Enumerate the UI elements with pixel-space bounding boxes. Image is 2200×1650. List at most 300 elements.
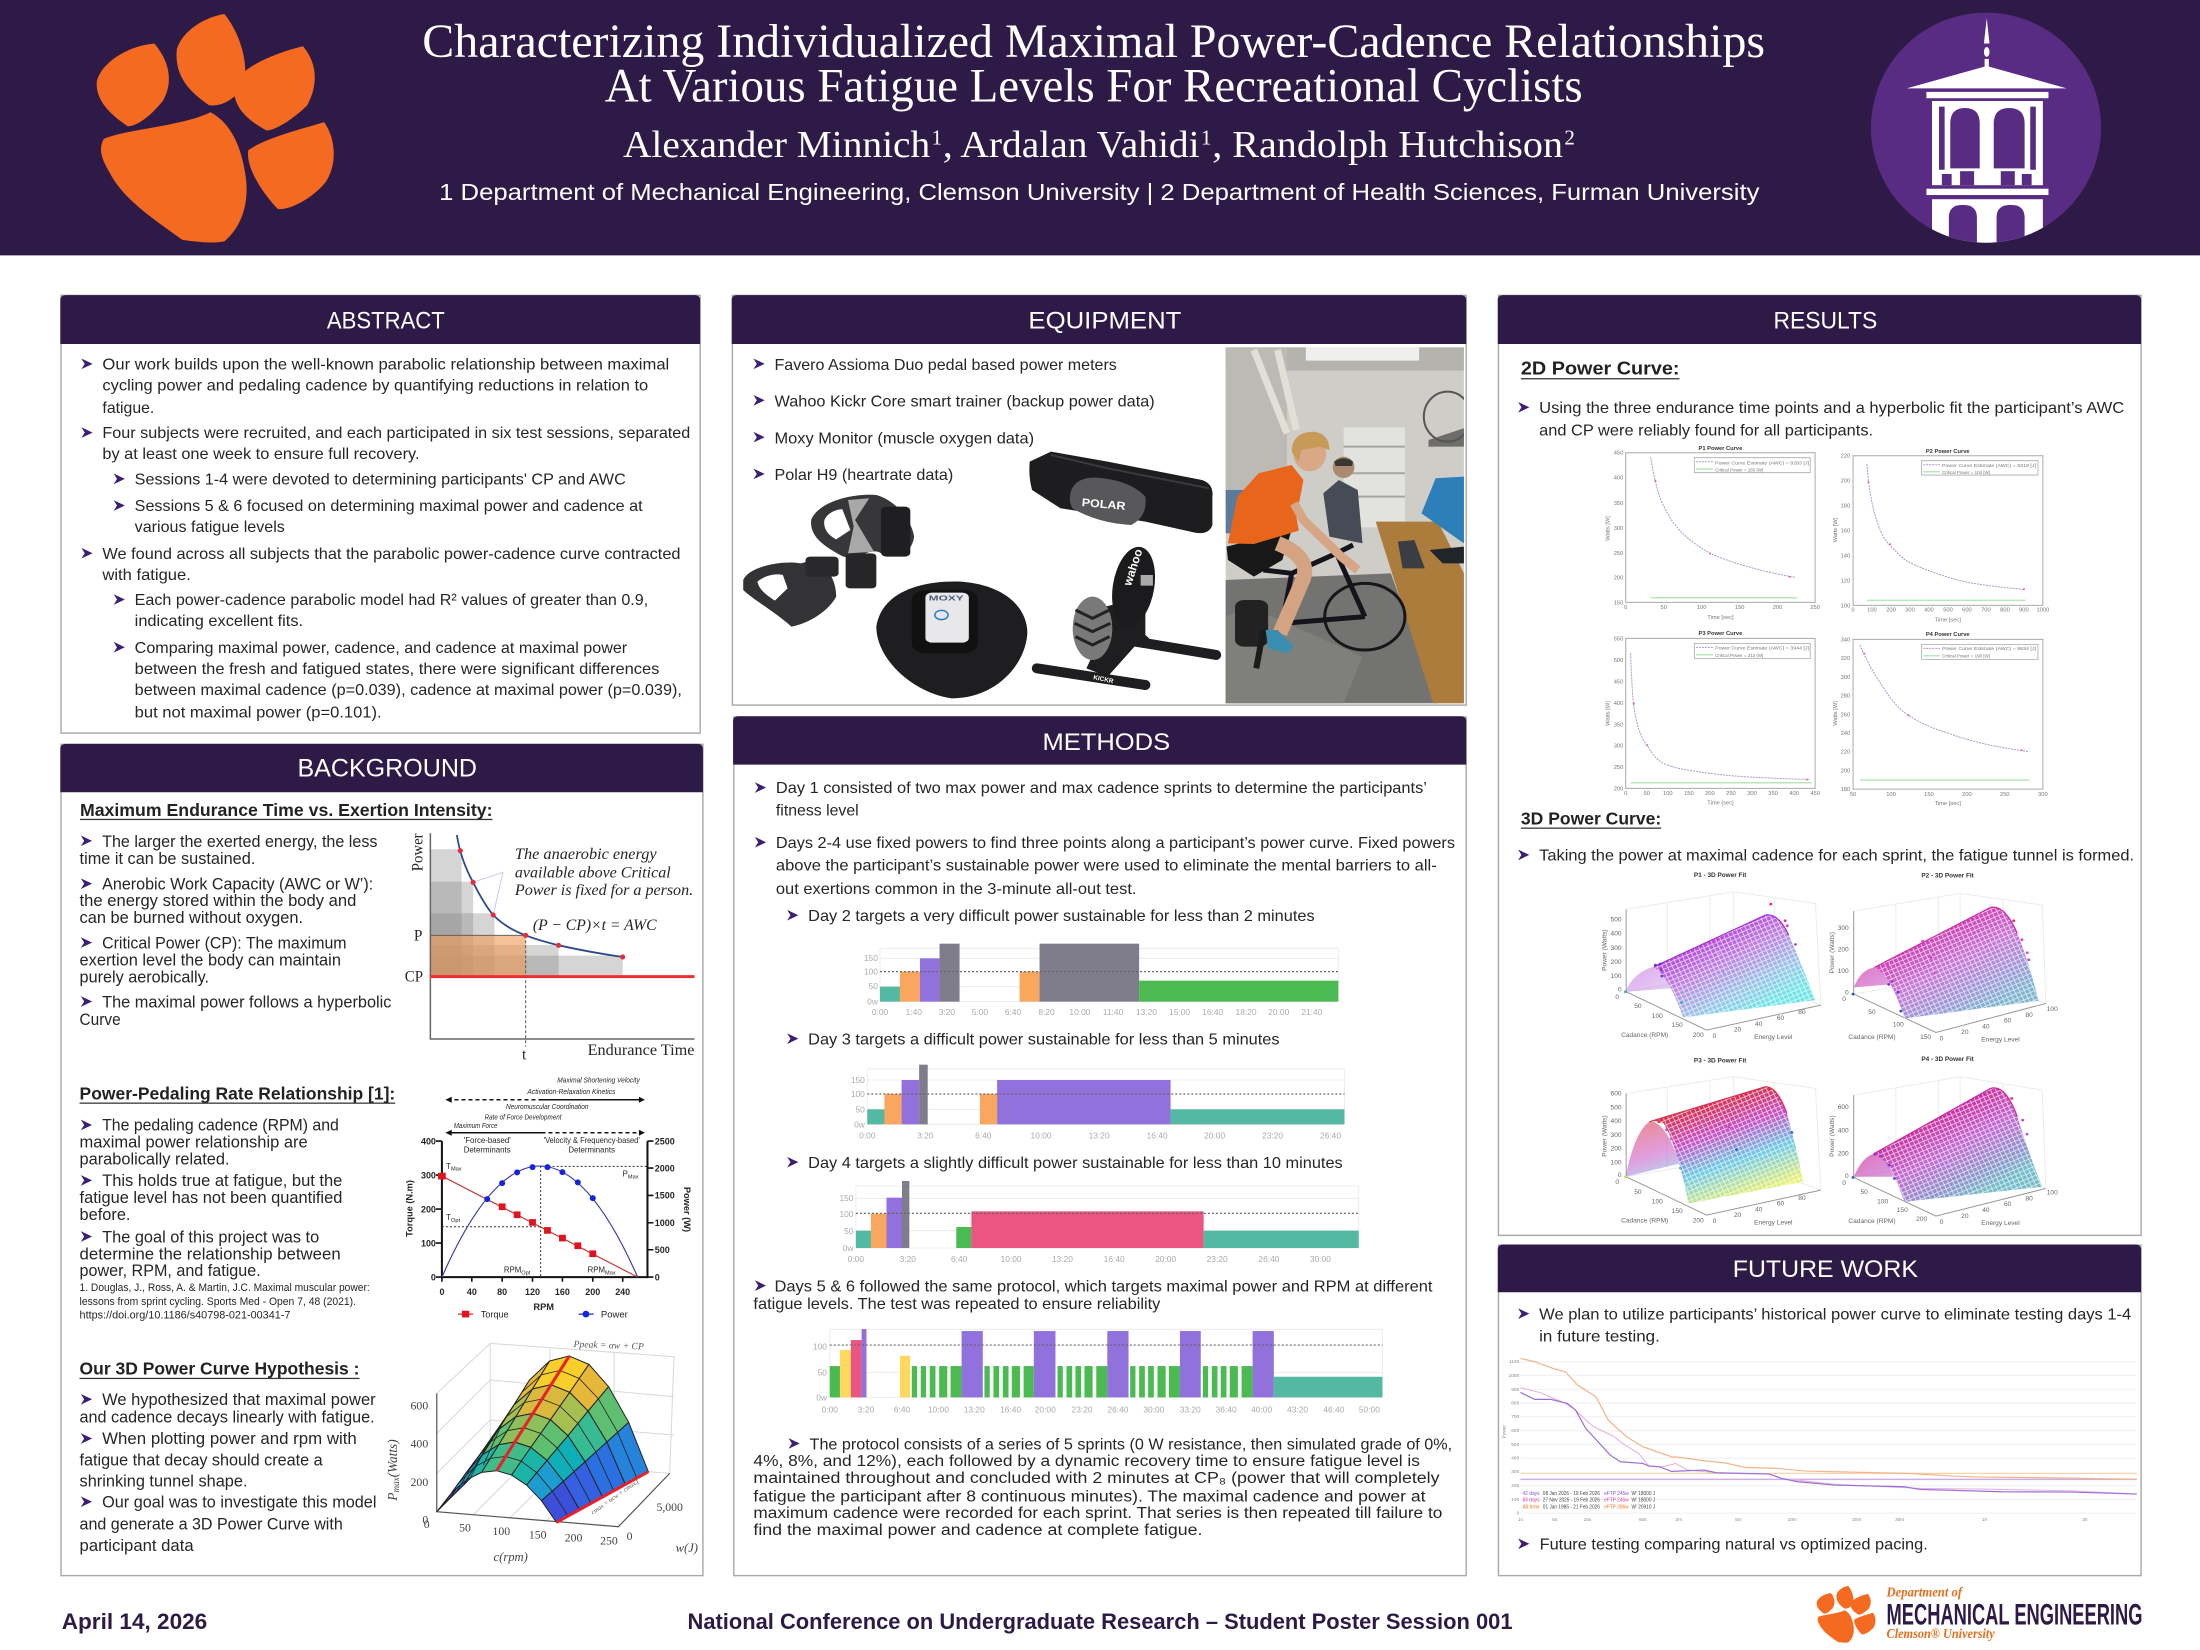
text: day 3: Day 3 targets a difficult power sustainable for less than 5 minutes xyxy=(808,1031,1280,1048)
text: 2D results xyxy=(1518,400,2124,439)
title: At Various Fatigue Levels For Recreational Cyclists xyxy=(605,60,1583,113)
power-pedaling text: maximal power relationship are xyxy=(80,1134,308,1152)
chart: P3 3D power fit: 500 xyxy=(1611,1104,1622,1111)
chart: historical power duration curve xyxy=(1501,1358,2137,1523)
chart: 3D power curve hypothesis surface: 5,000 xyxy=(656,1501,683,1514)
abstract text: We found across all subjects that the parabolic power-cadence curve contracted xyxy=(102,546,680,563)
chart: day 2 workout: 16:40 xyxy=(1202,1007,1224,1017)
chart: 3D power curve hypothesis surface: 0 xyxy=(422,1514,428,1527)
chart: P3 power curve: Power Curve Estimate (AWC) = 3944 [J] xyxy=(1715,646,1809,651)
chart: torque and power vs RPM: 'Force-based' xyxy=(464,1136,511,1145)
chart: torque and power vs RPM: Activation-Relaxation Kinetics xyxy=(526,1087,616,1096)
endurance text xyxy=(80,833,391,1029)
chart: P3 3D power fit: 0 xyxy=(1618,1172,1622,1179)
chart: historical power duration curve: eFTP 245w xyxy=(1604,1498,1629,1504)
subheading: 3D hypothesis: Our 3D Power Curve Hypothesis : xyxy=(80,1359,359,1378)
chart: day 4 workout: 50 xyxy=(844,1226,854,1236)
chart: day 5 and 6 workout: 16:40 xyxy=(1000,1404,1021,1414)
chart: historical power duration curve: W' 18000 J xyxy=(1631,1498,1656,1504)
chart: P4 3D power fit: 400 xyxy=(1838,1127,1849,1134)
chart: historical power duration curve: 600 xyxy=(1511,1428,1520,1434)
authors: Alexander Minnich xyxy=(623,124,930,166)
chart: torque and power vs RPM: Neuromuscular Coordination xyxy=(506,1102,588,1111)
chart: P3 3D power fit: 600 xyxy=(1611,1091,1622,1098)
chart: torque and power vs RPM: 240 xyxy=(615,1287,630,1297)
hypothesis text: fatigue that decay should create a xyxy=(80,1451,324,1469)
hypothesis text: and cadence decays linearly with fatigue. xyxy=(80,1408,375,1426)
chart: day 2 workout: 11:40 xyxy=(1103,1007,1124,1017)
chart: historical power duration curve: 1000 xyxy=(1509,1373,1520,1379)
power-pedaling text: before. xyxy=(80,1206,130,1224)
chart: P2 power curve: 200 xyxy=(1841,479,1850,485)
chart: historical power duration curve: 2m xyxy=(1675,1517,1682,1523)
chart: P2 power curve: 200 xyxy=(1886,608,1896,614)
chart: P3 3D power fit: 300 xyxy=(1611,1132,1622,1139)
chart: day 4 workout: 13:20 xyxy=(1052,1254,1073,1264)
chart: P2 3D power fit: 0 xyxy=(1845,989,1849,996)
citation: lessons from sprint cycling. Sports Med - Open 7, 48 (2021). xyxy=(80,1296,356,1308)
chart: P2 power curve: 100 xyxy=(1841,603,1850,609)
authors: , Randolph Hutchison xyxy=(1212,124,1563,166)
chart: P3 3D power fit: 50 xyxy=(1634,1189,1642,1196)
chart: day 2 workout: 15:00 xyxy=(1169,1007,1190,1017)
footer conference: National Conference on Undergraduate Research – Student Poster Session 001 xyxy=(687,1609,1512,1634)
chart: P3 power curve: 450 xyxy=(1810,791,1820,797)
chart: torque and power vs RPM: 120 xyxy=(525,1287,540,1297)
chart: torque and power vs RPM: 2500 xyxy=(655,1136,675,1146)
equipment list: Favero Assioma Duo pedal based power meters xyxy=(774,357,1117,374)
icon: small Clemson paw xyxy=(1817,1586,1875,1643)
chart: P1 3D power fit: 0 xyxy=(1615,994,1619,1001)
chart: day 2 workout: 0w xyxy=(867,997,879,1007)
chart: torque and power vs RPM: 200 xyxy=(421,1204,436,1214)
abstract text: by at least one week to ensure full recovery. xyxy=(102,446,420,463)
chart: P4 3D power fit: 20 xyxy=(1961,1213,1969,1220)
chart: P2 3D power fit: 60 xyxy=(2004,1018,2012,1025)
chart: P4 power curve: Critical Power = 190 [W] xyxy=(1942,653,1990,658)
text: day 2: Day 2 targets a very difficult power sustainable for less than 2 minutes xyxy=(808,908,1315,925)
chart: torque and power vs RPM: 160 xyxy=(555,1287,570,1297)
chart: P3 3D power fit: 100 xyxy=(1652,1198,1663,1205)
heading: abstract: ABSTRACT xyxy=(327,307,445,334)
chart: historical power duration curve: 2h xyxy=(2082,1517,2088,1523)
chart: day 5 and 6 workout: 33:20 xyxy=(1180,1404,1201,1414)
hypothesis text: We hypothesized that maximal power xyxy=(102,1391,376,1409)
chart: historical power duration curve: 5s xyxy=(1552,1517,1558,1523)
chart: day 5 and 6 workout xyxy=(813,1329,1382,1414)
citation: https://doi.org/10.1186/s40798-021-00341-7 xyxy=(80,1310,290,1322)
chart: 3D power curve hypothesis surface: w(J) xyxy=(676,1541,698,1555)
chart: P4 power curve: 260 xyxy=(1841,712,1850,718)
text: protocol description: maximum cadence were recorded for each sprint. That series is then repeated till failure to xyxy=(753,1505,1443,1522)
endurance text: exertion level the body can maintain xyxy=(80,951,341,969)
chart: day 3 workout: 23:20 xyxy=(1262,1131,1283,1141)
chart: 3D power curve hypothesis surface: 0 xyxy=(424,1518,430,1531)
endurance text: the energy stored within the body and xyxy=(80,892,356,910)
chart: P2 power curve: 300 xyxy=(1905,608,1915,614)
chart: P1 3D power fit: 40 xyxy=(1755,1021,1763,1028)
chart: day 2 workout: 6:40 xyxy=(1005,1007,1022,1017)
footer logo: Department of Mechanical Engineering: Department of xyxy=(1886,1585,1964,1600)
chart: P2 3D power fit: 20 xyxy=(1961,1029,1969,1036)
chart: day 4 workout: 20:00 xyxy=(1155,1254,1177,1264)
chart: P2 3D power fit: Energy Level xyxy=(1981,1036,2020,1043)
chart: P1 power curve: 200 xyxy=(1773,605,1782,611)
chart: day 3 workout: 10:00 xyxy=(1031,1131,1052,1141)
chart: P4 3D power fit: 0 xyxy=(1845,1173,1849,1180)
chart: P1 power curve: 400 xyxy=(1614,476,1623,482)
text: protocol description: The protocol consists of a series of 5 sprints (0 W resistance, then simulated grade of 0%, xyxy=(810,1436,1452,1453)
text: protocol description xyxy=(753,1436,1452,1539)
equipment list xyxy=(753,357,1155,484)
power-pedaling text xyxy=(80,1117,342,1280)
chart: P2 power curve: Critical Power = 104 [W] xyxy=(1942,470,1990,475)
chart: P2 power curve: 600 xyxy=(1962,608,1972,614)
chart: P4 power curve: 240 xyxy=(1841,731,1850,737)
chart: torque and power vs RPM: 200 xyxy=(585,1287,600,1297)
text: protocol description: maintained throughout and concluded with 2 minutes at CP₈ (power that will completely xyxy=(753,1470,1440,1487)
chart: P2 3D power fit: 0 xyxy=(1842,996,1846,1003)
chart: day 5 and 6 workout: 100 xyxy=(813,1342,827,1352)
icon: Moxy monitor xyxy=(876,582,1027,698)
chart: P2 power curve: 100 xyxy=(1867,608,1877,614)
abstract text: Comparing maximal power, cadence, and cadence at maximal power xyxy=(135,640,628,657)
chart: P4 power curve: 50 xyxy=(1850,792,1856,798)
chart: torque and power vs RPM: 0 xyxy=(439,1287,444,1297)
chart: P3 power curve: 200 xyxy=(1614,786,1623,792)
chart: P1 power curve: 250 xyxy=(1614,551,1623,557)
chart: P3 power curve: 100 xyxy=(1663,791,1673,797)
chart: torque and power vs RPM: 500 xyxy=(655,1245,670,1255)
chart: P4 3D power fit: 60 xyxy=(2004,1201,2012,1208)
text: days 5 and 6 xyxy=(753,1279,1433,1313)
chart: day 3 workout: 100 xyxy=(851,1089,865,1099)
chart: P4 power curve: Watts [W] xyxy=(1833,701,1839,726)
chart: torque and power vs RPM: RPM xyxy=(533,1302,554,1312)
chart: P3 3D power fit: 20 xyxy=(1734,1212,1742,1219)
chart: P2 power curve: 800 xyxy=(2000,608,2010,614)
chart: P2 3D power fit: 100 xyxy=(2047,1006,2058,1013)
chart: P1 power curve: 450 xyxy=(1614,451,1623,457)
chart: P2 3D power fit: Cadance (RPM) xyxy=(1848,1034,1896,1041)
endurance text: time it can be sustained. xyxy=(80,850,255,868)
chart: P3 power curve: Time [sec] xyxy=(1707,800,1734,806)
text: future pacing: Future testing comparing natural vs optimized pacing. xyxy=(1540,1536,1928,1553)
chart: 3D power curve hypothesis surface: 100 xyxy=(492,1525,510,1538)
chart: P3 power curve: 250 xyxy=(1614,765,1623,771)
text: days 5 and 6: fatigue levels. The test was repeated to ensure reliability xyxy=(753,1296,1160,1313)
chart: P2 power curve: 220 xyxy=(1841,454,1850,460)
chart: P1 power curve: 100 xyxy=(1697,605,1706,611)
chart: P1 power curve: 300 xyxy=(1614,526,1623,532)
chart: P4 3D power fit: 40 xyxy=(1982,1207,1990,1214)
chart: day 5 and 6 workout: 50:00 xyxy=(1359,1404,1380,1414)
panel: methods xyxy=(733,716,1466,1576)
chart: P4 3D power fit: 80 xyxy=(2025,1196,2033,1203)
chart: historical power duration curve: 60s xyxy=(1639,1517,1647,1523)
chart: P2 3D power fit: 100 xyxy=(1838,968,1849,975)
abstract text: between maximal cadence (p=0.039), cadence at maximal power (p=0.039), xyxy=(135,682,682,699)
chart: historical power duration curve: 300 xyxy=(1511,1469,1520,1475)
chart: P3 power curve: Watts [W] xyxy=(1605,701,1611,726)
chart: P4 power curve: P4 Power Curve xyxy=(1926,632,1970,638)
chart: P3 power curve: 400 xyxy=(1614,701,1623,707)
chart: day 3 workout xyxy=(851,1065,1344,1141)
chart: day 2 workout: 0:00 xyxy=(872,1007,888,1017)
power-pedaling text: parabolically related. xyxy=(80,1151,230,1169)
chart: torque and power vs RPM: Max xyxy=(628,1174,639,1180)
chart: torque and power vs RPM: Maximal Shortening Velocity xyxy=(557,1076,640,1085)
chart: P2 3D power fit: 300 xyxy=(1838,925,1849,932)
hypothesis text: Our goal was to investigate this model xyxy=(102,1494,376,1512)
subheading: 2D power curve: 2D Power Curve: xyxy=(1521,358,1679,379)
chart: P4 3D power fit: 50 xyxy=(1860,1189,1868,1196)
chart: historical power duration curve: 5m xyxy=(1735,1517,1742,1523)
chart: 3D power curve hypothesis surface: P xyxy=(385,1492,400,1501)
chart: P2 power curve: 180 xyxy=(1841,504,1850,510)
chart: day 3 workout: 50 xyxy=(855,1105,865,1115)
chart: 3D power curve hypothesis surface: Ppeak = αw + CP xyxy=(572,1339,644,1352)
chart: historical power duration curve: All time xyxy=(1522,1504,1540,1510)
chart: torque and power vs RPM: Torque xyxy=(481,1309,509,1319)
chart: day 4 workout: 150 xyxy=(839,1193,854,1203)
endurance text: Anerobic Work Capacity (AWC or W’): xyxy=(102,875,373,893)
chart: P3 power curve: 500 xyxy=(1614,658,1623,664)
chart: 3D power curve hypothesis surface: 200 xyxy=(411,1476,428,1489)
chart: historical power duration curve: 200 xyxy=(1511,1483,1520,1489)
chart: P4 3D power fit: Energy Level xyxy=(1981,1220,2020,1227)
chart: day 2 workout: 18:20 xyxy=(1236,1007,1257,1017)
chart: P2 power curve: 120 xyxy=(1841,578,1850,584)
chart: day 5 and 6 workout: 46:40 xyxy=(1323,1404,1345,1414)
chart: 3D power curve hypothesis surface: (Watts) xyxy=(385,1439,400,1477)
abstract text: Our work builds upon the well-known parabolic relationship between maximal xyxy=(102,356,669,373)
chart: P3 3D power fit: 200 xyxy=(1611,1146,1622,1153)
chart: 3D power curve hypothesis surface: 400 xyxy=(411,1438,428,1451)
chart: P2 power curve xyxy=(1833,449,2049,624)
panel: results xyxy=(1498,295,2141,1235)
chart: historical power duration curve: W' 18000 J xyxy=(1631,1491,1656,1497)
chart: P3 3D power fit: 200 xyxy=(1693,1217,1704,1224)
chart: torque and power vs RPM: Opt xyxy=(451,1218,460,1224)
chart: day 5 and 6 workout: 36:40 xyxy=(1216,1404,1237,1414)
abstract text: Each power-cadence parabolic model had R² values of greater than 0.9, xyxy=(135,592,648,609)
chart: day 5 and 6 workout: 0w xyxy=(816,1393,828,1403)
icon: Wahoo Kickr trainer: wahoo xyxy=(1120,547,1145,588)
chart: historical power duration curve: eFTP 245w xyxy=(1604,1491,1629,1497)
chart: torque and power vs RPM: 2000 xyxy=(655,1163,675,1173)
chart: P3 power curve: 50 xyxy=(1644,791,1650,797)
chart: P3 power curve: 350 xyxy=(1768,791,1778,797)
chart: historical power duration curve: 84 days xyxy=(1522,1498,1540,1504)
chart: P4 3D power fit: 100 xyxy=(1877,1198,1888,1205)
chart: historical power duration curve: 400 xyxy=(1511,1455,1520,1461)
chart: 3D power curve hypothesis surface: c(rpm) xyxy=(494,1550,528,1564)
chart: P1 3D power fit xyxy=(1602,872,1821,1041)
chart: day 2 workout: 50 xyxy=(869,981,878,991)
chart: P1 power curve: 50 xyxy=(1661,605,1667,611)
chart: P4 3D power fit: 200 xyxy=(1838,1150,1849,1157)
chart: P1 power curve: Time [sec] xyxy=(1707,615,1734,621)
chart: P1 3D power fit: 100 xyxy=(1611,973,1622,980)
chart: P4 power curve: 340 xyxy=(1841,637,1850,643)
chart: P3 3D power fit: Power (Watts) xyxy=(1602,1115,1609,1157)
text: future plan xyxy=(1518,1306,2131,1346)
chart: historical power duration curve: 30m xyxy=(1895,1517,1904,1523)
authors xyxy=(623,124,1575,166)
icon: Clemson paw logo xyxy=(97,14,334,243)
chart: day 5 and 6 workout: 0:00 xyxy=(822,1404,838,1414)
chart: P1 power curve: 350 xyxy=(1614,501,1623,507)
chart: day 4 workout: 0:00 xyxy=(848,1254,864,1264)
footer logo: Department of Mechanical Engineering: Clemson® University xyxy=(1887,1626,1995,1641)
chart: P2 power curve: 140 xyxy=(1841,553,1850,559)
chart: torque and power vs RPM: Power (W) xyxy=(682,1187,692,1232)
chart: day 3 workout: 0:00 xyxy=(859,1131,876,1141)
title xyxy=(422,15,1765,113)
chart: P2 power curve: 900 xyxy=(2019,608,2029,614)
abstract text: between the fresh and fatigued states, there were significant differences xyxy=(135,661,659,678)
endurance text: can be burned without oxygen. xyxy=(80,909,303,927)
chart: day 5 and 6 workout: 6:40 xyxy=(894,1404,911,1414)
methods intro text: fitness level xyxy=(776,803,859,820)
text: day 4: Day 4 targets a slightly difficult power sustainable for less than 10 minutes xyxy=(808,1155,1343,1172)
abstract text: Four subjects were recruited, and each participated in six test sessions, separated xyxy=(102,425,690,442)
chart: torque and power vs RPM: 0 xyxy=(655,1272,660,1282)
chart: critical power hyperbola: t xyxy=(522,1046,527,1063)
hypothesis text: and generate a 3D Power Curve with xyxy=(80,1515,343,1533)
chart: day 4 workout: 16:40 xyxy=(1104,1254,1125,1264)
chart: day 5 and 6 workout: 20:00 xyxy=(1035,1404,1056,1414)
chart: P1 3D power fit: 500 xyxy=(1611,917,1622,924)
chart: P1 3D power fit: Power (Watts) xyxy=(1602,929,1609,971)
hypothesis text: shrinking tunnel shape. xyxy=(80,1473,247,1491)
chart: historical power duration curve: 15s xyxy=(1584,1517,1592,1523)
chart: P4 3D power fit: Power (Watts) xyxy=(1829,1115,1836,1157)
chart: torque and power vs RPM: 100 xyxy=(421,1238,436,1248)
chart: P2 power curve: 400 xyxy=(1924,608,1934,614)
chart: P4 power curve: 300 xyxy=(2038,792,2048,798)
chart: P2 3D power fit: 0 xyxy=(1940,1036,1944,1043)
chart: P3 3D power fit: 40 xyxy=(1755,1207,1763,1214)
chart: P2 3D power fit: 150 xyxy=(1920,1034,1931,1041)
chart: torque and power vs RPM: P xyxy=(623,1170,628,1179)
icon: Furman seal xyxy=(1871,13,2101,244)
chart: P4 3D power fit: 150 xyxy=(1897,1207,1908,1214)
chart: P2 3D power fit: 80 xyxy=(2025,1012,2033,1019)
chart: day 5 and 6 workout: 13:20 xyxy=(964,1404,985,1414)
chart: P2 3D power fit: Power (Watts) xyxy=(1829,932,1836,973)
text: protocol description: find the maximal power and cadence at complete fatigue. xyxy=(753,1522,1202,1539)
chart: P1 3D power fit: Cadance (RPM) xyxy=(1621,1032,1668,1039)
chart: P3 3D power fit: 0 xyxy=(1713,1218,1717,1225)
chart: day 2 workout: 8:20 xyxy=(1038,1007,1055,1017)
chart: 3D power curve hypothesis surface: 600 xyxy=(411,1399,428,1412)
chart: day 5 and 6 workout: 50 xyxy=(818,1367,827,1377)
chart: P4 3D power fit: P4 - 3D Power Fit xyxy=(1921,1056,1975,1063)
chart: day 4 workout: 3:20 xyxy=(900,1254,916,1264)
chart: torque and power vs RPM: T xyxy=(446,1162,451,1171)
chart: P1 3D power fit: 0 xyxy=(1713,1033,1717,1040)
chart: P3 power curve: 250 xyxy=(1726,791,1736,797)
icon: Moxy monitor: MOXY xyxy=(929,594,965,603)
chart: P1 power curve: 150 xyxy=(1614,600,1623,606)
hypothesis text: participant data xyxy=(80,1537,195,1555)
chart: P1 3D power fit: 100 xyxy=(1652,1013,1663,1020)
icon: Wahoo Kickr trainer: KICKR xyxy=(1093,674,1114,685)
chart: torque and power vs RPM: 1000 xyxy=(655,1218,675,1228)
chart: P1 power curve: Watts [W] xyxy=(1605,516,1611,541)
chart: torque and power vs RPM: 0 xyxy=(431,1272,436,1282)
chart: P1 3D power fit: 20 xyxy=(1734,1027,1742,1034)
chart: P4 power curve: 300 xyxy=(1841,675,1850,681)
photo: cyclist on trainer in lab xyxy=(1226,347,1471,703)
abstract text: cycling power and pedaling cadence by quantifying reductions in relation to xyxy=(102,377,648,394)
abstract text: indicating excellent fits. xyxy=(135,613,303,630)
chart: P2 power curve: 0 xyxy=(1851,608,1855,614)
text: 3D results: Taking the power at maximal cadence for each sprint, the fatigue tunnel is formed. xyxy=(1539,847,2134,864)
heading: background: BACKGROUND xyxy=(297,755,477,783)
chart: P1 3D power fit: 60 xyxy=(1777,1015,1784,1022)
chart: historical power duration curve: 20m xyxy=(1852,1517,1861,1523)
text: future plan: We plan to utilize participants’ historical power curve to eliminate testing days 1-4 xyxy=(1539,1306,2131,1323)
chart: 3D power curve hypothesis surface: 200 xyxy=(565,1532,583,1545)
chart: P4 power curve: Power Curve Estimate (AWC) = 8634 [J] xyxy=(1942,646,2036,651)
icon: Favero pedals xyxy=(743,495,914,627)
equipment list: Wahoo Kickr Core smart trainer (backup power data) xyxy=(774,394,1155,411)
chart: historical power duration curve: 1h xyxy=(1982,1517,1987,1523)
chart: P4 3D power fit: 200 xyxy=(1916,1216,1927,1223)
chart: day 5 and 6 workout: 10:00 xyxy=(928,1404,949,1414)
chart: P3 power curve: P3 Power Curve xyxy=(1699,631,1742,637)
citation: 1. Douglas, J., Ross, A. & Martin, J.C. Maximal muscular power: xyxy=(80,1282,370,1294)
chart: P4 power curve: Time [sec] xyxy=(1935,801,1961,807)
power-pedaling text: The pedaling cadence (RPM) and xyxy=(102,1117,339,1135)
chart: 3D power curve hypothesis surface: 50 xyxy=(459,1522,471,1535)
chart: P3 3D power fit: 60 xyxy=(1777,1201,1784,1208)
title: Characterizing Individualized Maximal Power-Cadence Relationships xyxy=(422,15,1765,68)
chart: torque and power vs RPM: 300 xyxy=(421,1170,436,1180)
chart: historical power duration curve: 1100 xyxy=(1509,1359,1520,1365)
chart: day 2 workout: 3:20 xyxy=(939,1007,955,1017)
chart: P4 power curve xyxy=(1833,632,2048,807)
chart: P1 3D power fit: 50 xyxy=(1634,1003,1642,1010)
chart: P3 power curve: Critical Power = 212 [W] xyxy=(1715,653,1763,658)
chart: P1 3D power fit: 80 xyxy=(1798,1009,1806,1016)
chart: historical power duration curve: 500 xyxy=(1511,1442,1520,1448)
abstract text: Sessions 1-4 were devoted to determining participants' CP and AWC xyxy=(135,471,626,488)
footer date: April 14, 2026 xyxy=(62,1609,207,1634)
text: days 5 and 6: Days 5 & 6 followed the same protocol, which targets maximal power and RPM at different xyxy=(774,1279,1433,1296)
chart: critical power hyperbola: The anaerobic energy xyxy=(515,846,657,863)
abstract text: with fatigue. xyxy=(101,567,191,584)
text: 2D results: Using the three endurance time points and a hyperbolic fit the participant’s AWC xyxy=(1539,400,2124,417)
abstract text: fatigue. xyxy=(102,400,154,417)
chart: day 5 and 6 workout: 23:20 xyxy=(1072,1404,1093,1414)
methods intro text: above the participant’s sustainable power were used to eliminate the mental barriers to all- xyxy=(776,857,1437,874)
chart: torque and power vs RPM: Torque (N.m) xyxy=(405,1180,415,1237)
chart: 3D power curve hypothesis surface: 0 xyxy=(627,1530,633,1543)
chart: P2 3D power fit xyxy=(1829,872,2058,1043)
chart: P3 3D power fit: 80 xyxy=(1798,1195,1806,1202)
text: protocol description: fatigue the participant after 8 continuous minutes). The maximal cadence and power at xyxy=(753,1488,1426,1505)
chart: P1 power curve: Critical Power = 160 [W] xyxy=(1715,468,1763,473)
chart: P1 power curve: 200 xyxy=(1614,576,1623,582)
chart: day 2 workout: 5:00 xyxy=(972,1007,988,1017)
abstract text: but not maximal power (p=0.101). xyxy=(135,704,382,721)
endurance text: Curve xyxy=(80,1011,121,1029)
chart: P2 3D power fit: 40 xyxy=(1982,1024,1990,1031)
